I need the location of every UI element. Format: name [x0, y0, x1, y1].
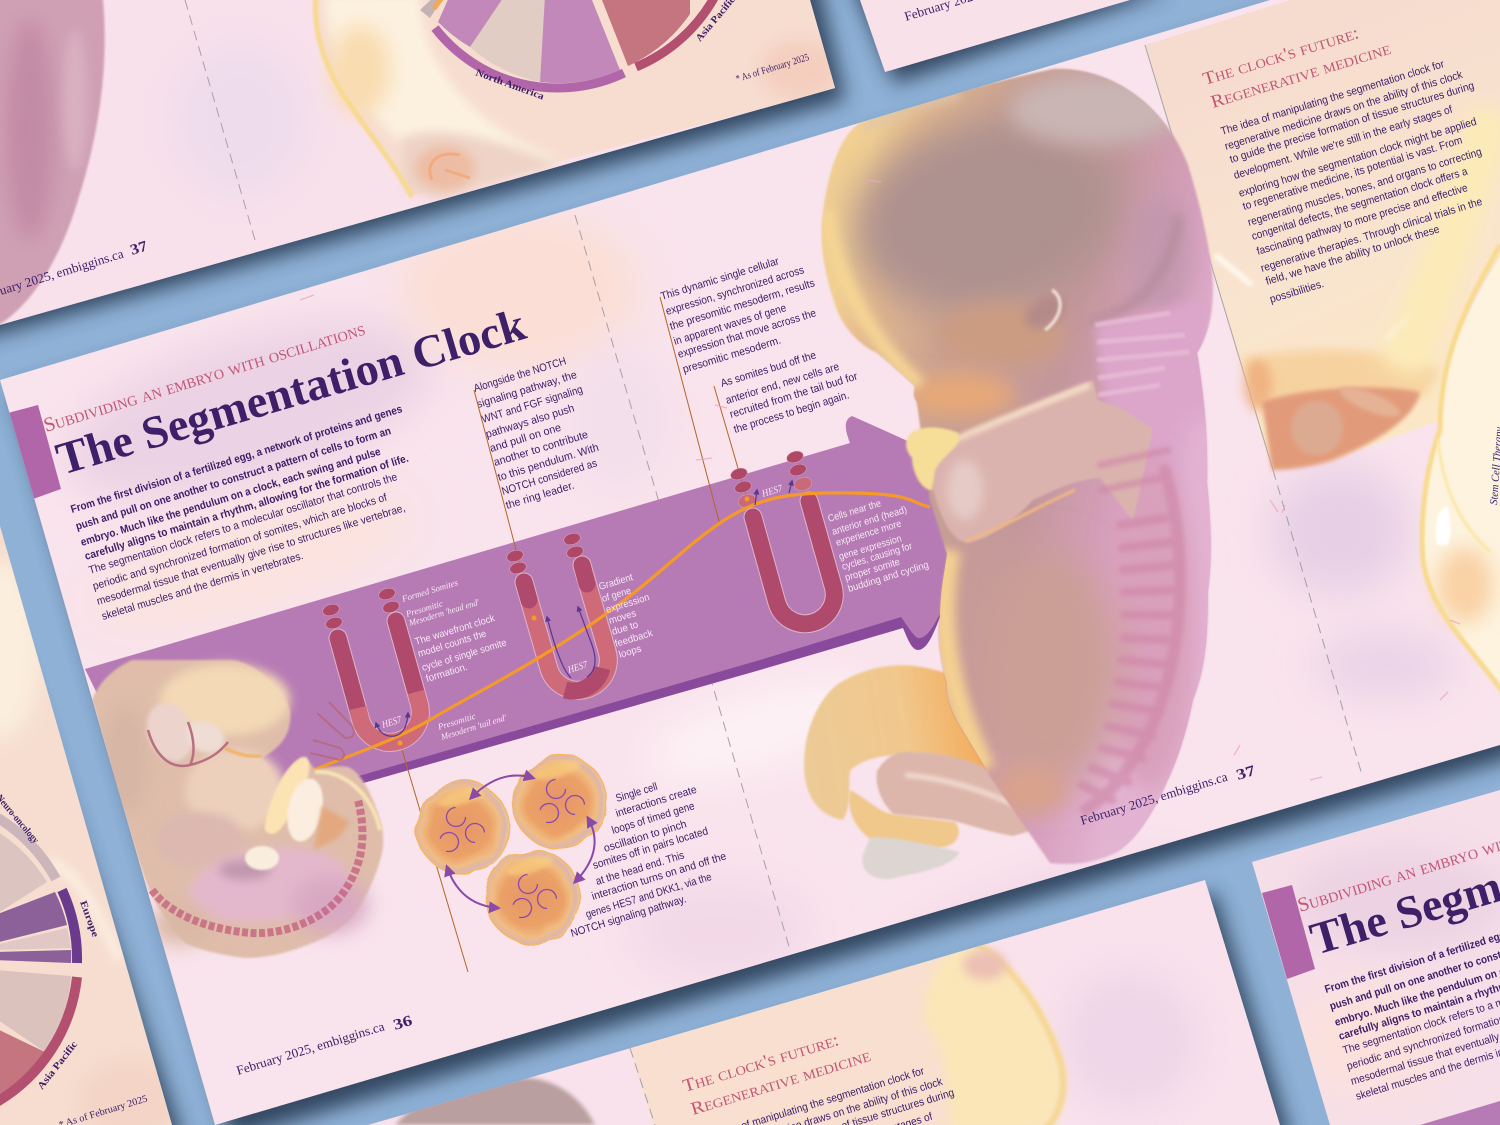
chart: circular wheel (top) [420, 0, 714, 88]
cell highlights [437, 756, 583, 880]
text block: alongside notch [472, 355, 600, 512]
HES7 labels: HES7 [380, 714, 404, 731]
text block: dynamic expression: expression that move across the [676, 307, 818, 361]
page footers: 37 [1234, 763, 1258, 784]
text block: single cell: interactions create [614, 784, 698, 820]
band labels: first diagram: Formed Somites [400, 577, 460, 604]
page footer: 37 [128, 238, 150, 259]
band labels: gradient: loops [618, 644, 643, 661]
text block: single cell: at the head end. This [594, 849, 686, 888]
embryo tail fold [265, 757, 309, 834]
heading: the clock's future: The clock's future: [1200, 22, 1361, 89]
text block: somites bud off [722, 353, 856, 433]
band labels: gradient: due to [611, 619, 640, 638]
embryo fragment: left [0, 0, 105, 330]
gene expression curve [313, 493, 930, 770]
text block: regenerative medicine: fascinating pathway to more precise and effective [1255, 182, 1469, 258]
pink specks [300, 180, 1460, 780]
text block: introduction: skeletal muscles and the dermis in vertebrates. [100, 550, 305, 623]
text block: alongside notch: WNT and FGF signaling [480, 384, 584, 426]
embryo sac fragment: grey-brown [395, 1078, 595, 1125]
head shading [833, 94, 1137, 336]
text block: single cell: Single cell [614, 781, 659, 805]
text block: alongside notch: and pull on one [488, 422, 563, 455]
band labels: anterior cells [827, 498, 930, 595]
text block: dynamic expression: This dynamic single cellular [659, 255, 781, 303]
diagram: second U segment [505, 531, 608, 691]
embryo arm and shoulder [930, 380, 1153, 543]
HES7 labels [380, 483, 785, 731]
text block: single cell: somites off in pairs located [591, 825, 710, 872]
text block: introduction: push and pull on one another to construct a pattern of cells to form an [74, 425, 393, 533]
HES7 labels: HES7 [760, 483, 785, 500]
page footers: February 2025, embiggins.ca [1078, 769, 1229, 828]
text block: regenerative medicine [1219, 58, 1484, 306]
chart labels: Europe [77, 899, 101, 939]
chart: circular wheel (left) [0, 818, 77, 1103]
chart labels: North America [474, 67, 545, 102]
band labels: first diagram: Mesoderm 'head end' [407, 597, 481, 628]
embryo legs [804, 665, 1067, 879]
text block: regenerative medicine: regenerative therapies. Through clinical trials in the [1259, 196, 1484, 275]
text block: dynamic expression: presomitic mesoderm. [681, 335, 782, 376]
text block: somites bud off: anterior end, new cells are [724, 361, 841, 407]
HES7 arrows [376, 481, 792, 736]
band labels: gradient: of gene [601, 585, 633, 605]
band labels: first diagram: cycle of single somite [421, 638, 508, 674]
chart labels [0, 793, 149, 1125]
text block: single cell: oscillation to pinch [602, 818, 688, 855]
text block: introduction: carefully aligns to maintain a rhythm, allowing for the formation of life. [83, 453, 410, 563]
chart labels [474, 0, 811, 102]
panel: top-left page [0, 0, 840, 330]
band labels: gradient: Gradient [598, 572, 635, 593]
text block: single cell: loops of timed gene [610, 800, 696, 837]
band labels: anterior cells: budding and cycling [847, 560, 930, 595]
embryo limb buds [139, 696, 201, 768]
yolk sac fragment: gold [924, 940, 1063, 1125]
text block: introduction: From the first division of a fertilized egg, a network of proteins and genes [69, 403, 404, 516]
heading: The clock's future: [680, 1029, 841, 1096]
panel: bottom-right page [1240, 778, 1500, 1125]
yolk sac with chart page [315, 0, 840, 200]
band labels: gradient: moves [608, 608, 638, 627]
band labels: anterior cells: Cells near the [827, 498, 883, 525]
panel: bottom-centre page [360, 870, 1290, 1125]
embryo ear [1019, 289, 1071, 335]
page footers [234, 763, 1258, 1078]
text block: somites bud off: the process to begin again. [732, 389, 851, 436]
annotation leader lines [400, 297, 747, 972]
text block: regenerative medicine: exploring how the segmentation clock might be applied [1237, 116, 1478, 200]
text block: introduction: embryo. Much like the pendulum on a clock, each swing and pulse [79, 446, 382, 549]
small U sketches near the tail [310, 702, 354, 760]
text block: regenerative medicine: to regenerative medicine, its potential is vast. From [1241, 134, 1464, 213]
somite beads [152, 800, 362, 933]
arrow band [85, 416, 947, 784]
text block: alongside notch: pathways also push [484, 402, 576, 441]
illustration: large embryo [804, 69, 1225, 879]
inner oscillation loops [437, 780, 584, 920]
text block: alongside notch: the ring leader. [504, 480, 576, 512]
diagram: first U segment [321, 586, 420, 742]
text block: somites bud off: recruited from the tail bud for [728, 370, 859, 421]
text block: single cell [569, 781, 728, 940]
text block: single cell: NOTCH signaling pathway. [569, 893, 688, 940]
band labels: first diagram [400, 577, 509, 742]
band labels: first diagram: Presomitic [404, 598, 444, 619]
text block: alongside notch: NOTCH considered as [500, 457, 599, 498]
text block: introduction: The segmentation clock refers to a molecular oscillator that controls the [87, 471, 399, 577]
text block: dynamic expression: expression, synchronized across [664, 264, 806, 318]
embryo hand [906, 427, 959, 490]
interaction arrows [447, 776, 595, 908]
band labels: first diagram: Presomitic [436, 711, 477, 732]
text block: alongside notch: to this pendulum. With [496, 442, 600, 484]
marker dots [398, 496, 750, 746]
next page: peach panel with yolk sac [1145, 0, 1500, 470]
band labels: anterior cells: gene expression [838, 533, 903, 563]
text block: regenerative medicine: The idea of manipulating the segmentation clock for [1219, 58, 1446, 138]
band labels: anterior cells: proper somite [844, 557, 902, 584]
text block: alongside notch: Alongside the NOTCH [472, 355, 568, 395]
embryo spine and ribs [1082, 450, 1180, 810]
heading: eyebrow: Subdividing an embryo with oscillations [41, 318, 368, 437]
text block: single cell: interaction turns on and off the [590, 850, 728, 903]
text block: regenerative medicine: regenerating muscles, bones, and organs to correcting [1246, 146, 1483, 229]
text block: regenerative medicine: to guide the precise formation of tissue structures during [1228, 80, 1476, 166]
text block: regenerative medicine: field, we have the ability to unlock these [1264, 223, 1441, 288]
text block: introduction: periodic and synchronized formation of somites, which are blocks of [91, 491, 389, 593]
embryo head and body [822, 69, 1225, 864]
panel: top-right page [860, 0, 1130, 72]
band labels: first diagram: formation. [425, 662, 469, 685]
text block: single cell: genes HES7 and DKK1, via the [584, 871, 713, 921]
band labels: first diagram: Mesoderm 'tail end' [439, 712, 509, 742]
text repeat: heading and intro [1262, 841, 1500, 1100]
text block: alongside notch: another to contribute [492, 429, 590, 469]
band labels: gradient: feedback [614, 628, 655, 650]
panel: bottom-left page [0, 520, 180, 1125]
text block: somites bud off: As somites bud off the [719, 349, 818, 390]
chart labels: Asia Pacific [36, 1039, 80, 1092]
text block: regenerative medicine: development. While we're still in the early stages of [1232, 103, 1455, 182]
page footers: February 2025, embiggins.ca [234, 1018, 386, 1078]
HES7 labels: HES7 [566, 659, 590, 676]
page footer [0, 240, 146, 294]
text block: dynamic expression [659, 255, 818, 376]
page footers: 36 [391, 1013, 415, 1034]
back [1100, 420, 1225, 860]
band labels: first diagram: The wavefront clock [414, 613, 497, 648]
illustration: interacting cells [417, 755, 607, 944]
text block: introduction: mesodermal tissue that eventually give rise to structures like vertebrae, [95, 502, 407, 608]
text block: regenerative medicine: possibilities. [1268, 278, 1325, 306]
accent block [8, 405, 61, 499]
band labels: gradient: expression [605, 592, 651, 616]
belly [970, 550, 1120, 790]
text block: regenerative medicine: regenerative medicine draws on the ability of this clock [1223, 69, 1464, 153]
chart labels: * As of February 2025 [735, 52, 811, 85]
yolk sac: gold bubble [1422, 240, 1500, 695]
text block: dynamic expression: the presomitic mesoderm, results [668, 277, 817, 333]
heading: the clock's future: Regenerative medicine [1208, 38, 1393, 112]
band labels: gradient [598, 572, 655, 661]
text block: regenerative medicine: congenital defects, the segmentation clock offers a [1250, 165, 1470, 243]
band labels: anterior cells: experience more [835, 518, 903, 549]
band labels: anterior cells: anterior end (head) [831, 505, 908, 538]
heading: Regenerative medicine [688, 1045, 873, 1119]
text block: dynamic expression: in apparent waves of gene [672, 302, 788, 348]
text block: alongside notch: signaling pathway, the [475, 369, 578, 411]
diagram: third U segment [729, 449, 834, 624]
band labels: anterior cells: cycles, causing for [841, 541, 914, 573]
text block: introduction [69, 403, 410, 623]
illustration: small embryo [92, 660, 383, 958]
back of neck and rolls [1095, 300, 1215, 520]
title: The Segmentation Clock [50, 298, 531, 485]
band labels: first diagram: model counts the [417, 628, 488, 660]
